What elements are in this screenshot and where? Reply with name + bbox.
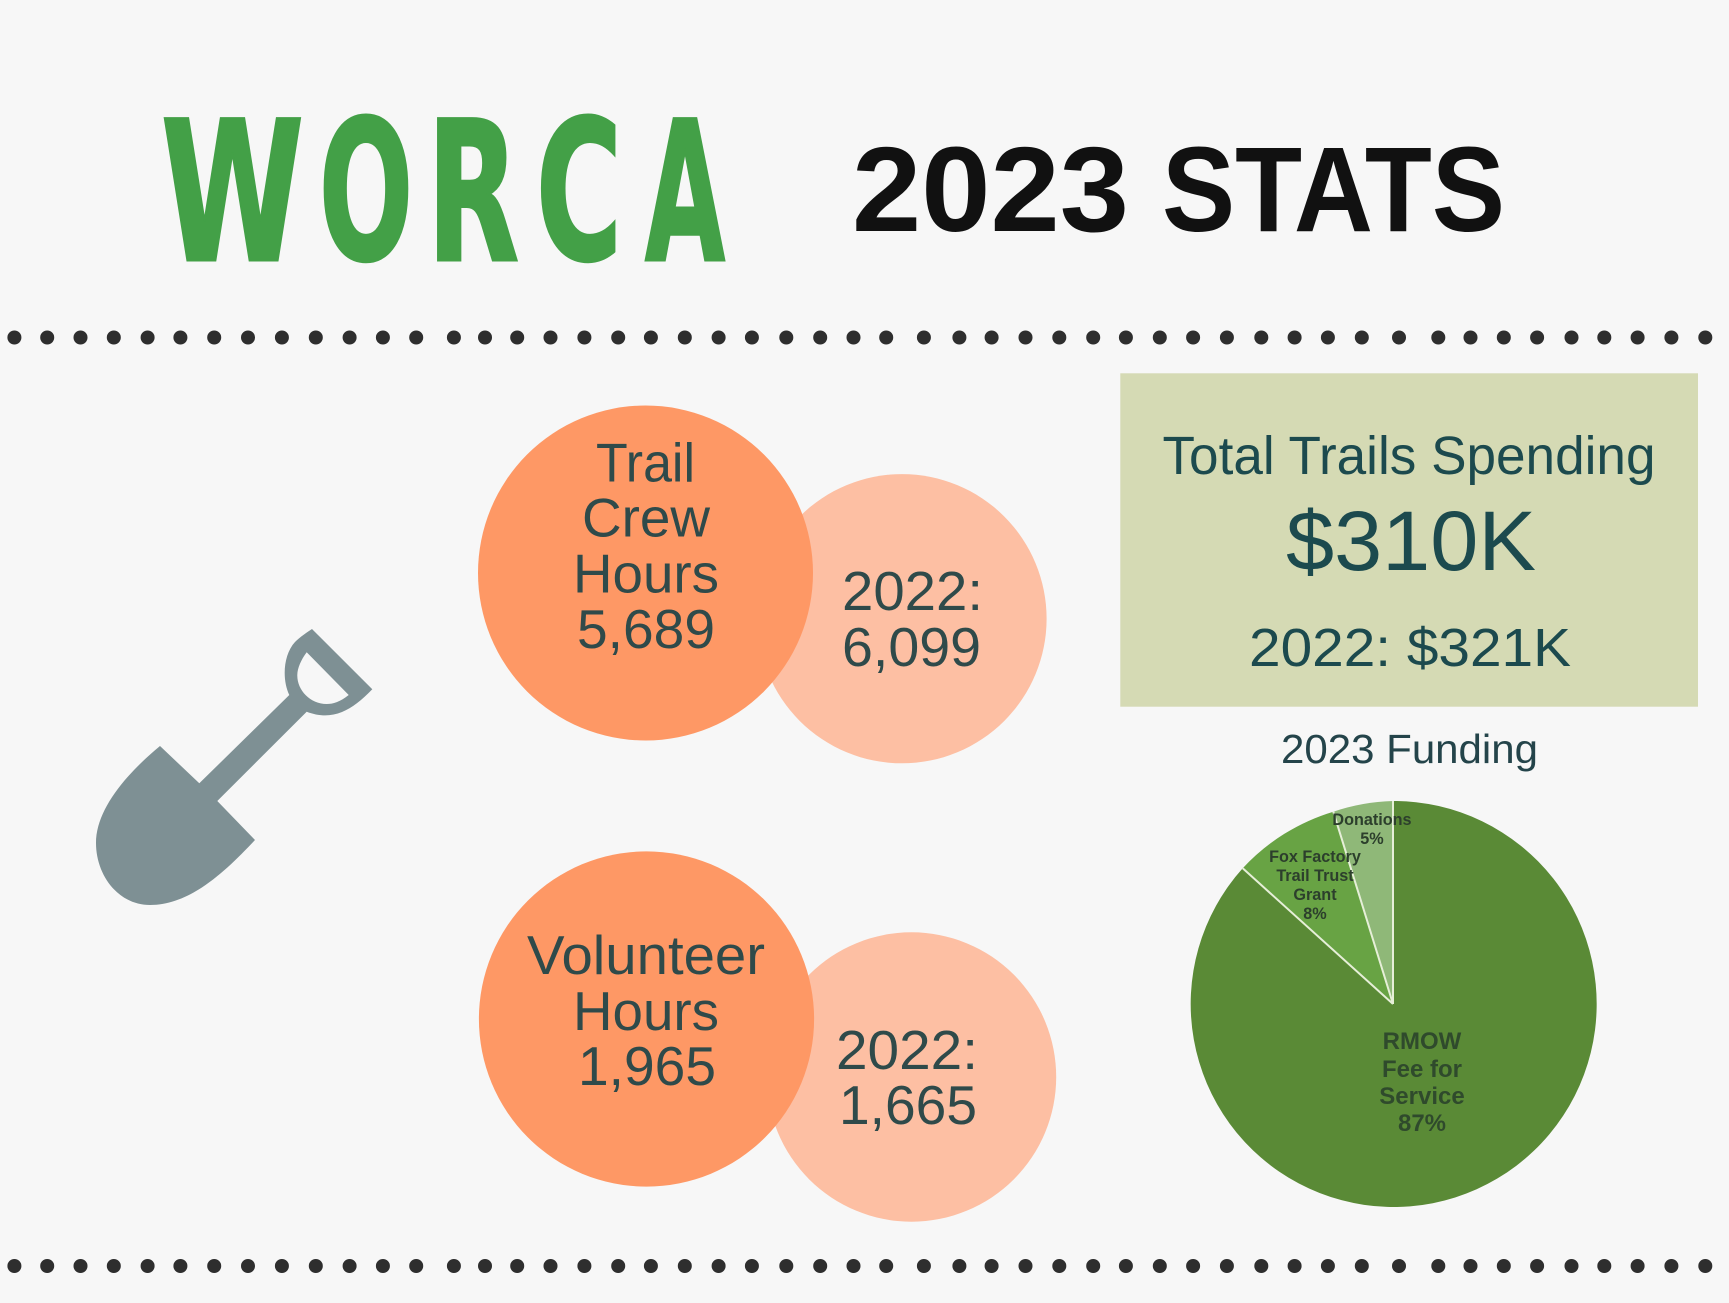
text: 2022 spending: 2022: $321K — [1249, 618, 1571, 678]
text: volunteer hours 2023: Volunteer — [527, 924, 765, 986]
slice: Fox Factory — [1243, 812, 1393, 1004]
title: 2023 STATS — [852, 121, 1505, 257]
label: RMOW: 87% — [1398, 1110, 1446, 1137]
label: donations: 5% — [1360, 830, 1384, 848]
circle: 2023 trail crew — [478, 406, 813, 740]
logo: WORCA: C — [536, 79, 622, 305]
slice separators — [1243, 801, 1393, 1004]
text: volunteer hours 2022 — [836, 1019, 978, 1136]
text: trail crew hours 2022: 2022: — [842, 560, 983, 622]
text: volunteer hours 2023 — [527, 924, 765, 1097]
bottom dotted divider — [14, 1259, 1705, 1273]
logo: WORCA: W — [161, 80, 304, 306]
text: volunteer hours 2023: 1,965 — [578, 1035, 716, 1097]
logo: WORCA — [161, 79, 725, 306]
text: trail crew hours 2023 — [573, 432, 719, 660]
text: total trails spending heading: Total Trails Spending — [1162, 426, 1656, 486]
panel: total trails spending — [1120, 373, 1698, 707]
text: trail crew hours 2023: 5,689 — [577, 598, 715, 660]
logo: WORCA: O — [319, 79, 413, 305]
panel: volunteer hours — [479, 851, 1056, 1222]
label: donations — [1332, 811, 1412, 848]
circle: 2023 volunteer — [479, 851, 814, 1187]
label: fox factory: Fox Factory — [1269, 848, 1361, 866]
label: RMOW: RMOW — [1383, 1028, 1462, 1055]
slice: RMOW — [1191, 801, 1597, 1207]
pie chart: 2023 funding — [1191, 801, 1597, 1207]
label: donations: Donations — [1332, 811, 1412, 829]
label: fox factory: Trail Trust — [1276, 867, 1354, 885]
title: 2023 STATS: 2023 — [852, 121, 1129, 257]
title: 2023 STATS: STATS — [1162, 121, 1505, 257]
text: trail crew hours 2023: Trail — [596, 432, 695, 494]
spending box — [1120, 373, 1698, 707]
text: trail crew hours 2022 — [842, 560, 983, 678]
circle: 2022 volunteer — [767, 932, 1056, 1222]
text: $310K: $310K — [1286, 494, 1536, 588]
slice: Donations — [1333, 801, 1393, 1004]
text: volunteer hours 2022: 1,665 — [839, 1074, 977, 1136]
label: RMOW — [1379, 1028, 1465, 1137]
icon: shovel — [96, 629, 372, 905]
top dotted divider — [14, 330, 1705, 344]
text: trail crew hours 2022: 6,099 — [842, 616, 981, 678]
label: fox factory: 8% — [1303, 905, 1327, 923]
panel: trail crew hours — [478, 406, 1047, 763]
text: volunteer hours 2022: 2022: — [836, 1019, 978, 1081]
label: fox factory: Grant — [1293, 886, 1337, 904]
text: volunteer hours 2023: Hours — [573, 980, 719, 1042]
label: fox factory — [1269, 848, 1361, 923]
logo: WORCA: R — [427, 80, 519, 306]
heading: 2023 funding: 2023 Funding — [1281, 726, 1538, 772]
label: RMOW: Service — [1379, 1083, 1465, 1110]
circle: 2022 trail crew — [757, 474, 1047, 763]
text: trail crew hours 2023: Crew — [582, 487, 710, 549]
text: trail crew hours 2023: Hours — [573, 543, 719, 605]
logo: WORCA: A — [645, 80, 725, 306]
label: RMOW: Fee for — [1382, 1056, 1462, 1083]
